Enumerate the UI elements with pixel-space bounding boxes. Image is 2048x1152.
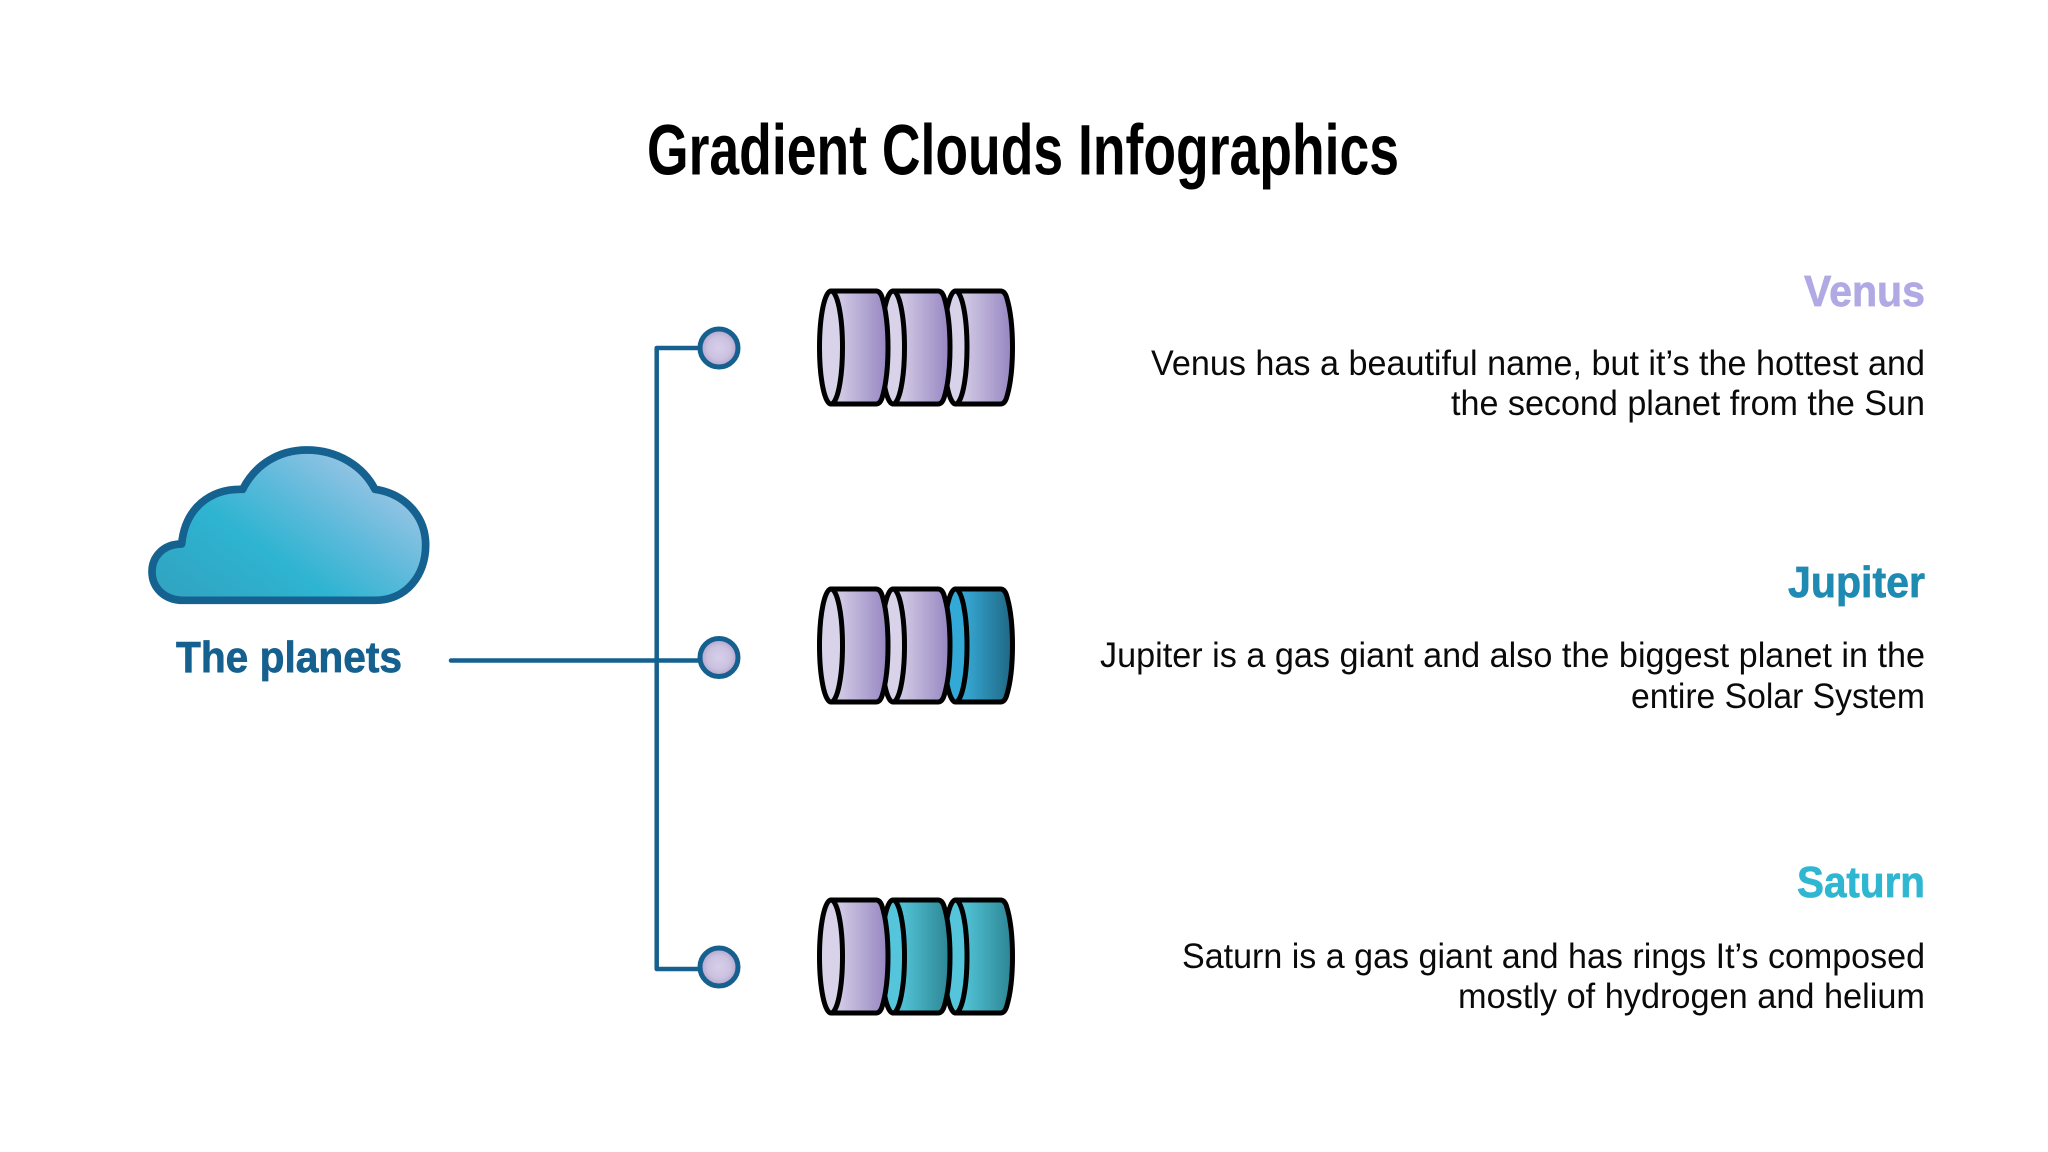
description: Jupiter: entire Solar System [1631,677,1925,716]
description: Saturn: Saturn is a gas giant and has rings It’s composed [1182,937,1925,976]
description: Saturn: mostly of hydrogen and helium [1458,977,1925,1016]
heading: Venus: Venus [1804,267,1925,316]
description: Venus [1151,344,1925,423]
description: Saturn [1182,937,1925,1016]
text block: Saturn [1182,858,1925,1016]
node: Saturn [700,948,738,986]
node: Jupiter [700,638,738,676]
description: Venus: Venus has a beautiful name, but it’s the hottest and [1151,344,1925,383]
text block: Jupiter [1100,558,1925,716]
cylinders: Jupiter row [820,589,1012,702]
icon: gradient cloud [152,450,426,600]
cylinders: Venus row [820,291,1012,404]
description: Jupiter [1100,636,1925,716]
heading: Jupiter: Jupiter [1788,558,1925,607]
heading: Saturn: Saturn [1797,858,1925,907]
connector lines [451,348,700,969]
node: Venus [700,329,738,367]
cylinders: Saturn row [820,900,1012,1013]
heading: the planets: The planets [176,633,402,682]
description: Jupiter: Jupiter is a gas giant and also the biggest planet in the [1100,636,1925,675]
text block: Venus [1151,267,1925,423]
description: Venus: the second planet from the Sun [1451,384,1925,423]
title: Gradient Clouds Infographics [647,112,1399,190]
